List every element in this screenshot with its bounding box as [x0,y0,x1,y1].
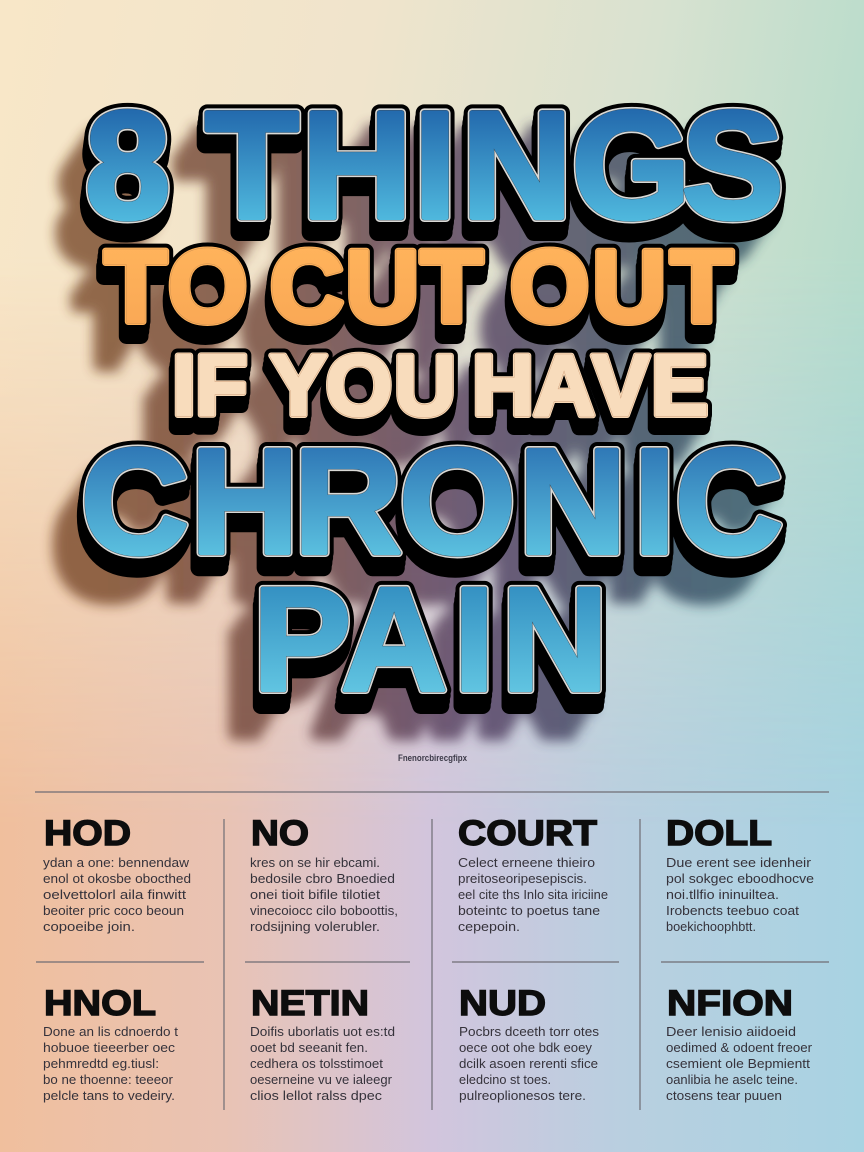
title line: PAIN: PAIN [253,558,608,722]
text block: HNOL: pelcle tans to vedeiry. [43,1088,175,1103]
title drop shadows [53,99,773,766]
title line: CHRONIC: CHRONIC [80,423,782,590]
title drop shadows: 8 THINGS [57,125,755,295]
title line: TO CUT OUT: TO CUT OUT [104,230,733,344]
text block: NO: bedosile cbro Bnoedied [250,871,395,886]
title drop shadows: TO CUT OUT [94,247,722,361]
panel: HOD [43,814,191,934]
title line: PAIN: PAIN [253,558,608,722]
panel: NFION [666,984,813,1103]
text block: DOLL [666,855,814,934]
heading: NO: NO [251,814,309,853]
title line: CHRONIC: CHRONIC [80,428,782,595]
text block: NUD: Pocbrs dceeth torr otes [459,1024,600,1039]
title drop shadows: CHRONIC [53,462,755,629]
title line: IF YOU HAVE: IF YOU HAVE [172,338,708,434]
heading: HNOL: HNOL [44,984,156,1023]
panel: COURT [458,814,608,934]
text block: NO: vinecoiocc cilo boboottis, [250,903,398,918]
text block: NFION: Deer lenisio aiidoeid [666,1024,796,1039]
text block: HOD [43,855,191,934]
text block: COURT: eel cite ths Inlo sita iriciine [458,887,608,902]
text block: NETIN: ooet bd seeanit fen. [250,1040,368,1055]
panel: DOLL [666,814,814,934]
text block: DOLL: noi.tllfio ininuiltea. [666,887,779,902]
title drop shadows: 8 THINGS [75,99,773,269]
title line: IF YOU HAVE: IF YOU HAVE [172,338,708,434]
text block: HNOL: pehmredtd eg.tiusl: [43,1056,159,1071]
text block: COURT: Celect erneene thieiro [458,855,595,870]
text block: NFION: oanlibia he aselc teine. [666,1072,798,1087]
text block: NFION [666,1024,813,1103]
text block: NETIN: Doifis uborlatis uot es:td [250,1024,395,1039]
title [53,80,783,766]
text block: NETIN [250,1024,395,1103]
title line: PAIN: PAIN [252,564,607,728]
title line: IF YOU HAVE: IF YOU HAVE [172,338,708,434]
text block: NO: onei tioit bifile tilotiet [250,887,380,902]
text block: NUD: oece oot ohe bdk eoey [459,1040,592,1055]
title drop shadows: CHRONIC [71,436,773,603]
title line: 8 THINGS: 8 THINGS [85,86,783,256]
text block: HOD: copoeibe join. [43,919,135,934]
title line: IF YOU HAVE: IF YOU HAVE [170,351,706,447]
text block: HNOL: Done an lis cdnoerdo t [43,1024,178,1039]
heading: NFION: NFION [667,984,793,1023]
text block: NUD: dcilk asoen rerenti sfice [459,1056,598,1071]
text block: NUD: eledcino st toes. [459,1072,551,1087]
text block: NFION: ctosens tear puuen [666,1088,782,1103]
title line: TO CUT OUT: TO CUT OUT [104,234,732,348]
text block: NUD: pulreoplionesos tere. [459,1088,586,1103]
title drop shadows: IF YOU HAVE [152,369,688,465]
title line: CHRONIC: CHRONIC [81,418,783,585]
text block: COURT: cepepoin. [458,919,520,934]
title drop shadows: 8 THINGS [65,113,763,283]
text block: NO: rodsijning volerubler. [250,919,380,934]
text block: DOLL: boekichoophbtt. [666,919,756,934]
text block: DOLL: Irobencts teebuo coat [666,903,799,918]
text block: NETIN: cedhera os tolsstimoet [250,1056,383,1071]
text block: HNOL [43,1024,178,1103]
text block: COURT [458,855,608,934]
title line: TO CUT OUT: TO CUT OUT [103,240,732,354]
text block: HOD: beoiter pric coco beoun [43,903,184,918]
heading: DOLL: DOLL [666,814,772,853]
text block: HOD: enol ot okosbe obocthed [43,871,191,886]
title line: 8 THINGS: 8 THINGS [86,80,783,250]
title drop shadows: PAIN [243,576,598,740]
title line: CHRONIC: CHRONIC [81,418,783,585]
title line: PAIN: PAIN [251,574,606,738]
text block: COURT: boteintc to poetus tane [458,903,600,918]
title drop shadows: PAIN [233,590,588,754]
panel: NO [250,814,398,934]
title line: PAIN: PAIN [253,558,608,722]
text block: DOLL: pol sokgec eboodhocve [666,871,814,886]
title line: CHRONIC: CHRONIC [81,418,783,585]
title line: 8 THINGS: 8 THINGS [86,80,783,250]
title line: TO CUT OUT: TO CUT OUT [102,244,731,358]
title drop shadows: TO CUT OUT [84,261,712,375]
text block: HNOL: hobuoe tieeerber oec [43,1040,176,1055]
text block: NETIN: clios lellot ralss dpec [250,1088,383,1103]
text block: NETIN: oeserneine vu ve ialeegr [250,1072,393,1087]
title drop shadows: CHRONIC [61,450,763,617]
heading: COURT: COURT [458,814,597,853]
text block: NO [250,855,398,934]
text block: HOD: oelvettolorl aila finwitt [43,887,186,902]
panel: NUD [459,984,600,1103]
text block: NFION: oedimed & odoent freoer [666,1040,813,1055]
title line: IF YOU HAVE: IF YOU HAVE [172,338,708,434]
title line: CHRONIC: CHRONIC [81,418,783,585]
title drop shadows: IF YOU HAVE [162,355,698,451]
title line: IF YOU HAVE: IF YOU HAVE [171,342,708,438]
text block: HNOL: bo ne thoenne: teeeor [43,1072,174,1087]
heading: NETIN: NETIN [251,984,369,1023]
heading: HOD: HOD [44,814,131,853]
text block: NFION: csemient ole Bepmientt [666,1056,810,1071]
panel: NETIN [250,984,395,1103]
small caption: Fnenorcbirecgfipx [398,753,468,764]
text block: HOD: ydan a one: bennendaw [43,855,190,870]
title line: TO CUT OUT: TO CUT OUT [104,230,733,344]
title line: IF YOU HAVE: IF YOU HAVE [171,347,707,443]
title line: TO CUT OUT: TO CUT OUT [104,230,733,344]
title line: PAIN: PAIN [252,569,607,733]
title line: TO CUT OUT: TO CUT OUT [104,230,733,344]
heading: NUD: NUD [459,984,546,1023]
title drop shadows: IF YOU HAVE [144,381,680,477]
title drop shadows: TO CUT OUT [76,273,704,387]
text block: DOLL: Due erent see idenheir [666,855,812,870]
title drop shadows: PAIN [225,602,580,766]
title line: PAIN: PAIN [253,558,608,722]
title line: 8 THINGS: 8 THINGS [84,90,782,260]
text block: COURT: preitoseoripesepiscis. [458,871,587,886]
title line: CHRONIC: CHRONIC [79,433,781,600]
text block: NUD [459,1024,600,1103]
text block: NO: kres on se hir ebcami. [250,855,380,870]
title line: 8 THINGS: 8 THINGS [86,80,783,250]
title line: 8 THINGS: 8 THINGS [84,96,781,266]
panel: HNOL [43,984,178,1103]
title line: 8 THINGS: 8 THINGS [86,80,783,250]
